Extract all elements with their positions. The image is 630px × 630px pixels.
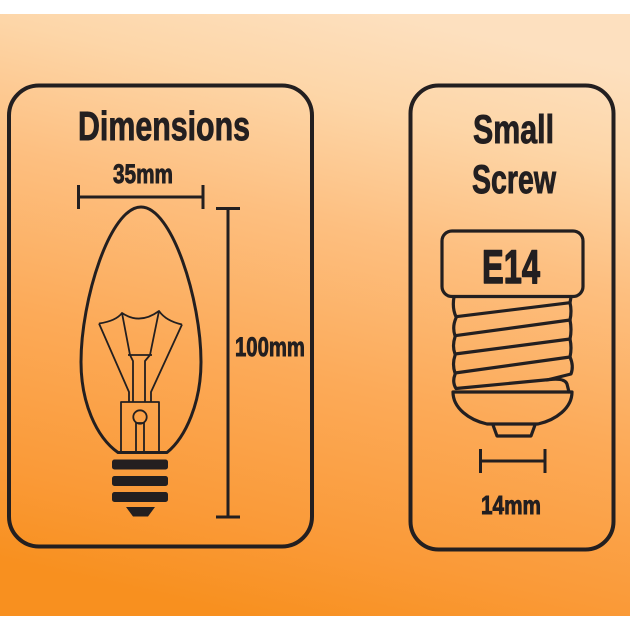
panel: dimensions [9, 86, 312, 546]
dome and tip [453, 392, 572, 436]
width dimension arrow [480, 449, 545, 473]
heading: Small Screw: Screw [472, 158, 557, 202]
cap collar [442, 231, 583, 296]
width label: 14mm: 14mm [481, 490, 541, 520]
icon: candle bulb [81, 207, 201, 516]
bulb screw base [112, 460, 168, 516]
heading: Dimensions: Dimensions [78, 103, 250, 149]
icon: E14 screw cap [442, 231, 583, 436]
width label: 35mm: 35mm [113, 159, 173, 189]
cap label: E14: E14 [482, 240, 540, 293]
width dimension arrow [78, 185, 203, 209]
heading: Small Screw: Small [473, 108, 554, 152]
heading: Small Screw [472, 108, 557, 202]
screw threads [453, 297, 572, 392]
height label: 100mm: 100mm [235, 332, 305, 362]
height dimension arrow [216, 208, 240, 517]
panel: small screw [410, 86, 614, 550]
